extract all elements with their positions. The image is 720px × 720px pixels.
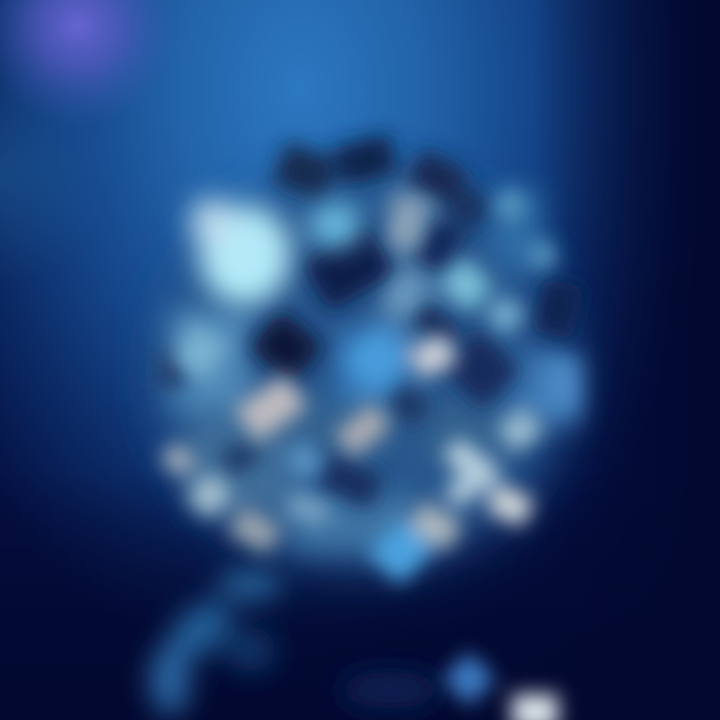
purple light flare — [0, 0, 190, 130]
diamond facets: bright highlights — [190, 198, 361, 305]
diamond facets: mid tones — [170, 180, 580, 550]
diamond body — [156, 133, 584, 585]
diamond base tone — [157, 175, 567, 565]
reflection swirl — [150, 571, 440, 716]
diamond facets: dark shadows — [156, 133, 584, 510]
diamond reflection — [150, 571, 558, 720]
reflection highlights — [442, 652, 558, 720]
